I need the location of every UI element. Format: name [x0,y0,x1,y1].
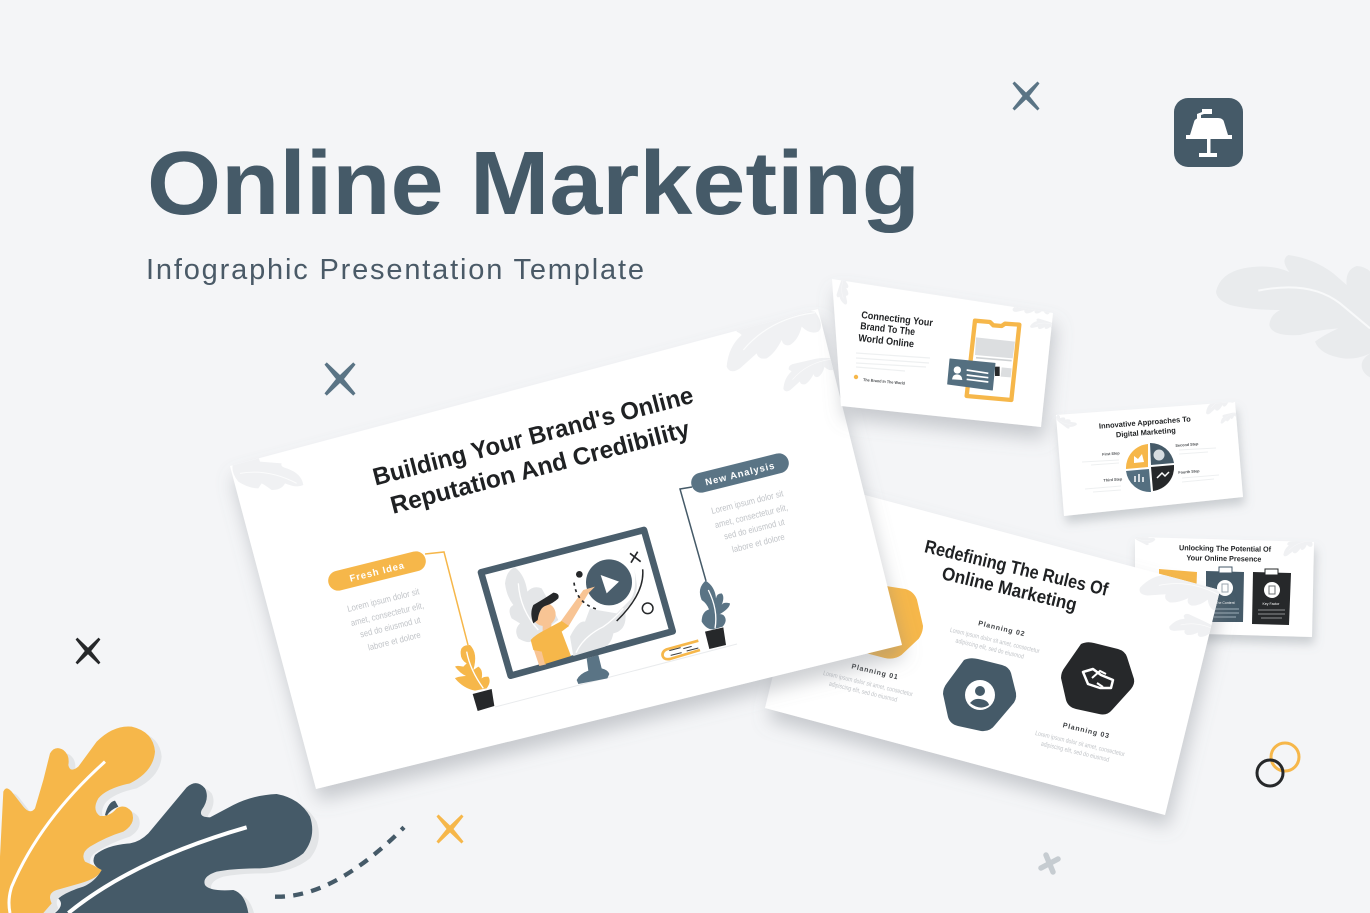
cross mark: black [76,638,100,664]
text: new analysis body: sed do eiusmod ut [723,517,786,541]
plus mark: grey [1041,855,1058,872]
leaves: bottom left [0,727,404,913]
text: planning 03: adipiscing elit, sed do eiusmod [1040,741,1110,764]
heading: connecting: World Online [858,333,915,350]
subtitle: Infographic Presentation Template [146,254,644,286]
card: black [1252,569,1291,625]
cross mark: slate top [1012,82,1040,110]
heading: connecting: Connecting Your [861,310,934,329]
text: planning 03 [1032,716,1129,767]
step labels: First Step [1102,451,1120,457]
heading: unlocking [1179,543,1272,564]
step labels: Third Step [1103,477,1123,483]
text: planning 03: Lorem ipsum dolor sit amet, consectetur [1034,730,1126,758]
dots and marks [574,552,653,621]
title: Online Marketing [147,134,920,234]
rings [1257,743,1299,786]
card: slate [1206,567,1244,622]
heading: innovative: Digital Marketing [1116,426,1176,439]
connector: orange [425,552,468,645]
plants and book [455,581,730,711]
card: orange [1159,569,1197,600]
screen leaves [505,562,637,656]
panel: innovative slide [1055,396,1243,516]
heading: connecting: Brand To The [860,321,916,338]
step labels: Fourth Step [1178,469,1200,475]
monitor screen [481,530,673,676]
text: fresh idea body: amet, consectetur elit, [350,600,425,628]
ground line [495,644,737,707]
panel: connecting slide [832,275,1056,427]
text: planning 02: Planning 02 [977,620,1026,638]
pill: fresh idea [326,549,428,593]
text: fresh idea body [346,586,425,652]
phone [967,321,1019,400]
text: new analysis body: labore et dolore [731,532,786,554]
heading: innovative: Innovative Approaches To [1099,414,1191,431]
heading: innovative [1099,414,1191,439]
card: slate: The Content [1215,601,1235,605]
panel: unlocking slide [1132,527,1314,637]
decorative leaf: right background [1216,255,1370,378]
pill: new analysis [689,451,791,495]
heading: unlocking: Your Online Presence [1186,553,1261,564]
panel: planning slide [765,483,1228,815]
text: new analysis body: Lorem ipsum dolor sit [710,488,785,516]
heading: redefining: Redefining The Rules Of [923,536,1111,600]
pill: fresh idea: Fresh Idea [349,560,406,585]
step labels [1102,442,1200,483]
monitor stand [577,655,609,684]
body lines [856,353,930,371]
book [662,641,700,659]
hexagon: orange [850,587,922,658]
text: new analysis body: amet, consectetur elit, [714,502,789,530]
plant: orange [455,645,494,711]
pill: new analysis: New Analysis [704,460,776,488]
bullet [854,375,858,379]
text: planning 02: Lorem ipsum dolor sit amet, consectetur [949,627,1041,655]
heading: building your brand: Building Your Brand's Online [370,382,696,491]
id card [948,359,995,390]
plant: slate [700,581,730,649]
step body lines [1082,448,1219,492]
text: new analysis body [710,488,789,554]
heading: connecting [858,310,934,350]
text: fresh idea body: labore et dolore [367,630,422,652]
panel: main slide [230,309,902,789]
person [531,587,595,666]
heading: building your brand: Reputation And Credibility [388,416,693,520]
connector: slate [680,487,706,581]
card: black: Key Factor [1263,602,1280,606]
watermark leaves [232,310,835,490]
text: planning 01: adipiscing elit, sed do eiusmod [828,681,898,704]
text: planning 02 [947,614,1044,664]
hexagon: black with handshake icon [1061,642,1134,714]
step labels: Second Step [1175,442,1199,448]
hexagon: slate with person icon [943,658,1016,731]
text: planning 01 [820,657,917,707]
text: planning 02: adipiscing elit, sed do eiusmod [955,637,1025,661]
text: fresh idea body: Lorem ipsum dolor sit [346,586,421,614]
text: planning 01: Planning 01 [851,663,899,681]
pie chart [1126,443,1174,492]
cross mark: orange [436,814,464,844]
icon: keynote app [1174,98,1243,167]
play button [586,559,632,605]
heading: redefining: Online Marketing [940,562,1079,615]
monitor illustration [481,530,673,684]
heading: unlocking: Unlocking The Potential Of [1179,543,1272,554]
bullet label: The Brand In The World [863,377,906,386]
phone and card [948,321,1019,400]
text: planning 01: Lorem ipsum dolor sit amet, consectetur [822,670,914,698]
text: planning 03: Planning 03 [1062,722,1110,740]
text: fresh idea body: sed do eiusmod ut [359,615,422,639]
cross mark: slate left [324,362,356,396]
